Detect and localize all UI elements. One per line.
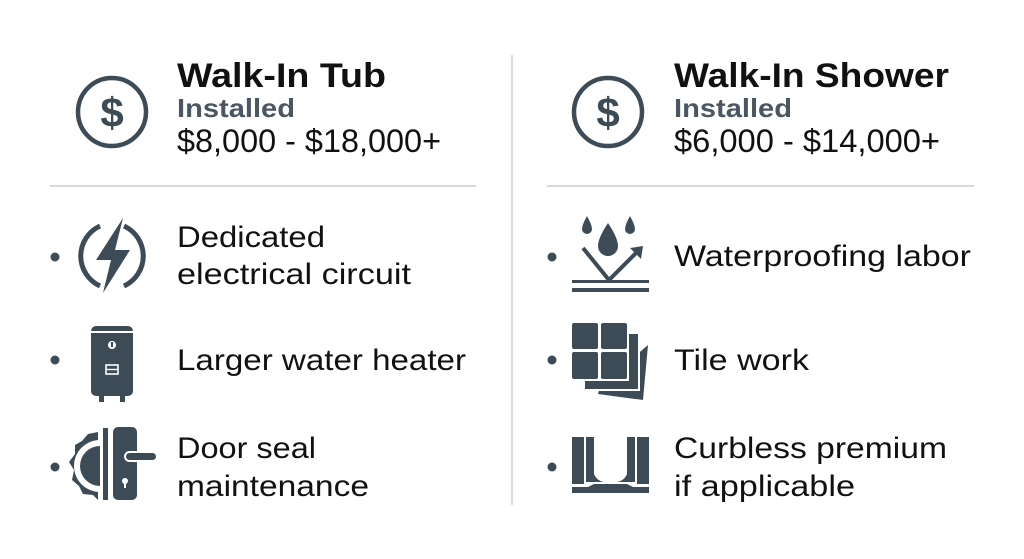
item: door seal — [50, 427, 369, 503]
item: waterproofing: Waterproofing labor — [674, 240, 971, 273]
item: water heater: Larger water heater — [177, 344, 466, 377]
item: door seal: Door seal — [177, 432, 316, 465]
icon: dollar tub: $ — [100, 89, 124, 136]
icon: dollar shower — [574, 78, 642, 146]
text: shower price: $6,000 - $14,000+ — [674, 123, 940, 159]
item: waterproofing — [548, 216, 971, 292]
icon: dollar shower: $ — [596, 89, 620, 136]
item: electrical circuit: Dedicated — [177, 221, 325, 254]
panel: walk-in tub — [50, 57, 466, 503]
heading: walk-in tub: Walk-In Tub — [177, 57, 386, 95]
item: tile work: Tile work — [674, 344, 810, 377]
item: curbless: if applicable — [674, 470, 855, 503]
item: water heater — [50, 326, 466, 402]
text: tub price: $8,000 - $18,000+ — [177, 123, 441, 159]
item: electrical circuit — [50, 218, 412, 293]
item: curbless — [548, 432, 947, 503]
icon: dollar tub — [78, 78, 146, 146]
item: door seal: maintenance — [177, 470, 369, 503]
item: electrical circuit: electrical circuit — [177, 258, 412, 291]
text: installed tub: Installed — [177, 93, 295, 123]
panel: walk-in shower — [548, 57, 971, 503]
item: curbless: Curbless premium — [674, 432, 947, 465]
heading: walk-in shower: Walk-In Shower — [674, 57, 949, 95]
text: installed shower: Installed — [674, 93, 792, 123]
item: tile work — [548, 321, 810, 400]
